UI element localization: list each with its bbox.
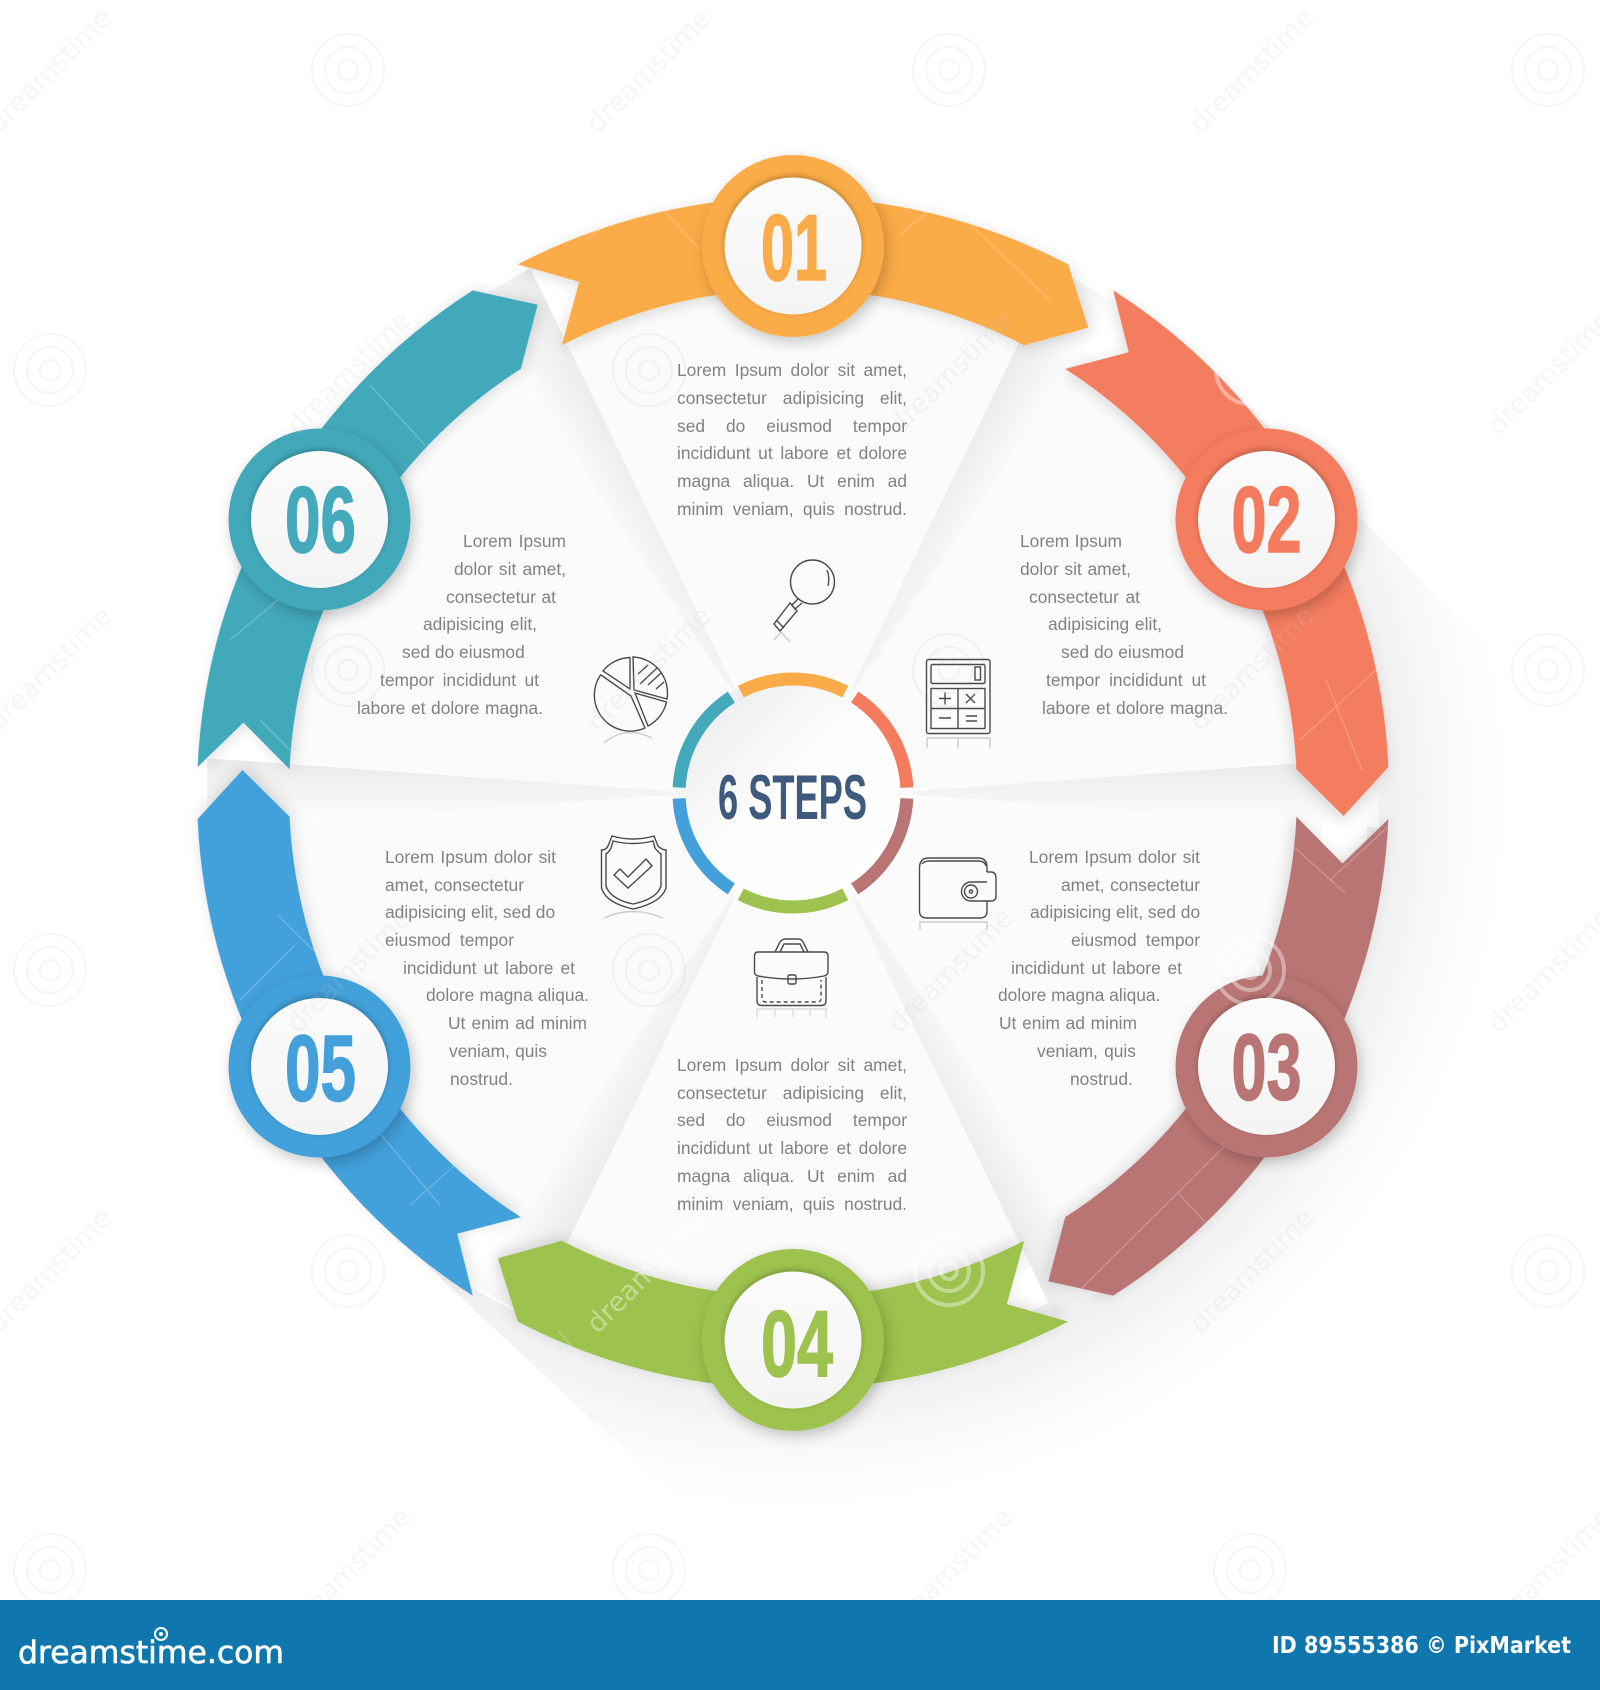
icon: wallet	[920, 858, 996, 930]
number badge 04	[702, 1249, 884, 1431]
text block: step 3	[998, 847, 1200, 1088]
text: dolor sit amet,	[454, 559, 566, 579]
text: incididunt ut labore et	[403, 958, 575, 978]
number badge 05: 05	[285, 1016, 356, 1120]
text: minim veniam, quis nostrud.	[677, 1194, 907, 1214]
number badge 01	[702, 155, 884, 337]
watermark text: dreamstime	[883, 305, 1019, 441]
text: amet, consectetur	[1061, 874, 1200, 894]
text: consectetur at	[1029, 586, 1140, 606]
text: adipisicing elit, sed do	[1030, 902, 1200, 922]
text block: step 4	[677, 1055, 907, 1214]
text: Ut enim ad minim	[448, 1013, 587, 1033]
watermark spirals over ribbons	[915, 336, 1284, 1305]
text: nostrud.	[1070, 1068, 1133, 1088]
center title: 6 STEPS	[718, 763, 867, 833]
text: Lorem Ipsum	[1020, 531, 1122, 551]
text: sed do eiusmod	[402, 642, 525, 662]
text: Lorem Ipsum dolor sit amet,	[677, 1055, 907, 1075]
watermark text: dreamstime	[1184, 1203, 1320, 1339]
number badge 05	[228, 976, 410, 1158]
watermark text: dreamstime	[883, 1502, 1019, 1638]
text: eiusmod tempor	[385, 930, 514, 950]
text: incididunt ut labore et	[1011, 958, 1182, 978]
icon: magnifying glass	[774, 560, 834, 642]
text: incididunt ut labore et dolore	[677, 1138, 907, 1158]
text: nostrud.	[450, 1068, 513, 1088]
number badge 03: 03	[1232, 1014, 1302, 1120]
watermark text: dreamstime	[581, 3, 717, 139]
footer bar	[0, 1600, 1600, 1690]
ribbon arrow 01	[518, 197, 1088, 345]
ribbon arrow 02	[1043, 257, 1457, 825]
text: minim veniam, quis nostrud.	[677, 498, 907, 518]
text: magna aliqua. Ut enim ad	[677, 471, 907, 491]
watermark text: dreamstime	[1184, 601, 1320, 737]
text: Lorem Ipsum	[463, 531, 566, 551]
text block: step 1	[677, 360, 907, 518]
watermark cross lines on ribbons	[230, 180, 1390, 1395]
number badge 04: 04	[761, 1291, 833, 1396]
text: dolor sit amet,	[1020, 559, 1131, 579]
text: Ut enim ad minim	[999, 1013, 1137, 1033]
text: Lorem Ipsum dolor sit	[1029, 847, 1200, 867]
watermark text over green ribbon: dreamstime	[581, 1203, 717, 1339]
long cast shadow of wheel	[372, 372, 1600, 1690]
text: amet, consectetur	[385, 874, 524, 894]
text block: step 6	[357, 531, 566, 718]
text: incididunt ut labore et dolore	[677, 443, 907, 463]
ribbon arrow 03	[1033, 779, 1447, 1347]
watermark text: dreamstime	[1184, 3, 1320, 139]
number badge 06	[228, 428, 410, 610]
text: eiusmod tempor	[1071, 930, 1200, 950]
text: tempor incididunt ut	[380, 670, 539, 690]
icon: pie chart	[594, 657, 668, 743]
text: sed do eiusmod tempor	[677, 1110, 907, 1130]
text: Lorem Ipsum dolor sit amet,	[677, 360, 907, 380]
watermark text: dreamstime	[281, 305, 417, 441]
wedge dividers	[177, 251, 1409, 1335]
number badge 06: 06	[285, 467, 356, 572]
text: Lorem Ipsum dolor sit	[385, 847, 556, 867]
text: veniam, quis	[449, 1040, 547, 1060]
text: labore et dolore magna.	[1042, 698, 1228, 718]
watermark text: dreamstime	[281, 1502, 417, 1638]
text: labore et dolore magna.	[357, 698, 543, 718]
text block: step 5	[385, 847, 589, 1088]
number badge 02	[1176, 428, 1358, 610]
ribbon arrow 05	[129, 761, 543, 1329]
icon: briefcase	[754, 939, 828, 1018]
text: dolore magna aliqua.	[998, 985, 1160, 1005]
text: sed do eiusmod tempor	[677, 416, 907, 436]
number badge 02: 02	[1232, 467, 1302, 572]
text: adipisicing elit, sed do	[385, 902, 555, 922]
watermark text: dreamstime	[883, 903, 1019, 1039]
ribbon arrow 04	[498, 1241, 1068, 1389]
ribbon arrow 06	[139, 239, 553, 807]
text: adipisicing elit,	[1048, 614, 1162, 634]
text: adipisicing elit,	[423, 614, 537, 634]
icon: shield with check	[602, 836, 666, 918]
center disc	[675, 675, 911, 911]
text: consectetur adipisicing elit,	[677, 388, 907, 408]
center segmented ring	[668, 679, 918, 907]
text: dolore magna aliqua.	[426, 985, 589, 1005]
number badge 01: 01	[761, 195, 827, 300]
number badge 03	[1176, 976, 1358, 1158]
footer logo: dreamstime.com	[18, 1635, 284, 1671]
text: consectetur adipisicing elit,	[677, 1082, 907, 1102]
text: consectetur at	[446, 586, 556, 606]
icon: calculator	[926, 660, 990, 748]
text: tempor incididunt ut	[1046, 670, 1206, 690]
text: sed do eiusmod	[1061, 642, 1184, 662]
text block: step 2	[1020, 531, 1228, 718]
text: magna aliqua. Ut enim ad	[677, 1166, 907, 1186]
watermark text: dreamstime	[581, 601, 717, 737]
panel: wheel background wedges	[263, 263, 1323, 1323]
text: veniam, quis	[1037, 1040, 1136, 1060]
footer image id: ID 89555386 © PixMarket	[1272, 1633, 1571, 1659]
watermark text: dreamstime	[281, 903, 417, 1039]
